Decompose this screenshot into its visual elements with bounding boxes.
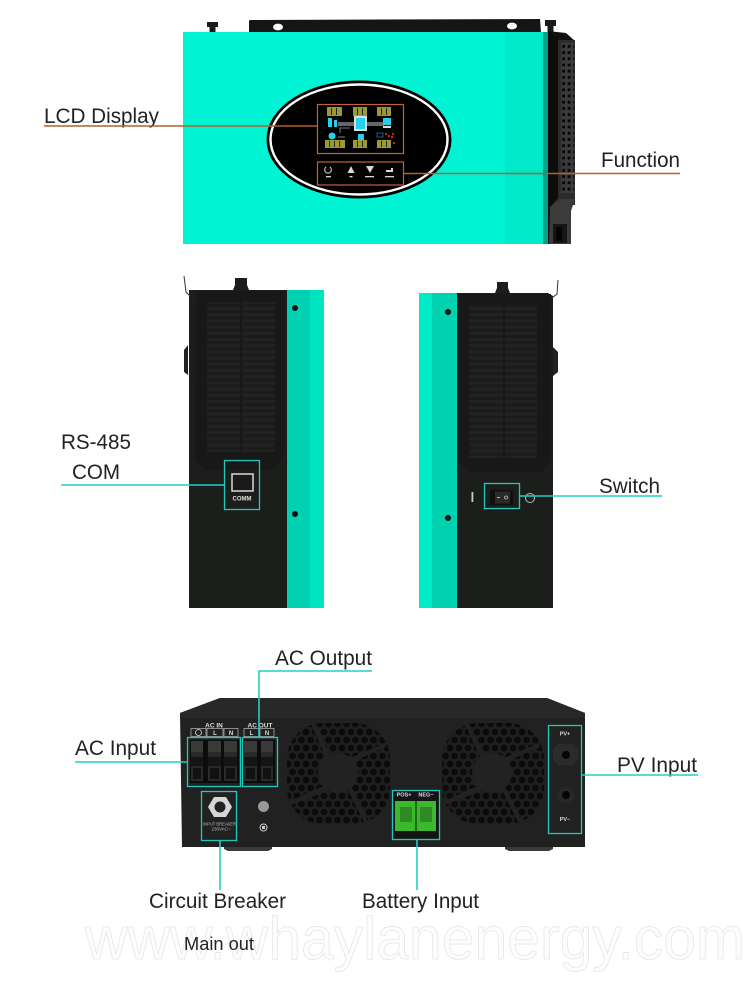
callout: AC Input: AC Input	[75, 737, 156, 760]
breaker nut: INPUT BREAKER	[203, 822, 237, 826]
AC IN labels: N	[265, 731, 269, 737]
AC IN labels	[191, 722, 274, 737]
fan left	[287, 723, 390, 824]
function buttons	[325, 166, 394, 177]
AC IN labels: N	[229, 731, 233, 737]
watermark: www.whaylanenergy.com	[84, 905, 745, 972]
AC IN labels: AC IN	[205, 722, 223, 730]
callout: LCD Display: LCD Display	[44, 105, 159, 128]
AC IN labels: L	[213, 731, 217, 737]
callout: PV Input	[548, 726, 698, 834]
top screws	[207, 22, 218, 32]
callout: Switch: Switch	[599, 475, 660, 498]
mounting bracket	[249, 19, 541, 32]
callout: AC Output	[242, 647, 372, 786]
vent grille	[195, 291, 285, 470]
AC terminals	[190, 740, 275, 783]
battery terminal: NEG−	[418, 792, 434, 798]
side panel	[548, 31, 575, 244]
front view of inverter	[183, 19, 575, 244]
indicator and ground	[258, 801, 269, 831]
left side view	[184, 276, 324, 608]
callout: Switch	[484, 475, 662, 508]
vent grille	[458, 294, 551, 472]
callout: Circuit Breaker	[149, 792, 286, 913]
teal side strip	[287, 290, 324, 608]
callout: Battery Input	[362, 790, 479, 913]
AC IN labels: AC OUT	[248, 722, 272, 730]
callout: Battery Input: Battery Input	[362, 890, 479, 913]
PV terminals: PV−	[560, 817, 570, 823]
PV terminals: PV+	[560, 732, 570, 738]
oval control panel	[266, 80, 452, 198]
callout: LCD Display	[44, 104, 404, 154]
COM port	[232, 474, 253, 502]
callout: Function: Function	[601, 149, 680, 172]
callout: AC Input	[75, 737, 240, 786]
text: Main out: Main out	[184, 934, 254, 954]
callout: RS-485 COM: RS-485	[61, 431, 131, 454]
battery terminal	[393, 790, 440, 839]
callout: AC Output: AC Output	[275, 647, 372, 670]
LCD icons	[325, 107, 395, 148]
breaker nut: 230VAC~	[211, 826, 231, 832]
breaker nut	[203, 797, 237, 832]
battery terminal: POS+	[397, 792, 411, 798]
chassis	[180, 698, 585, 847]
fan right	[442, 723, 544, 824]
teal side strip	[419, 293, 457, 608]
right side view	[419, 280, 558, 608]
PV terminals	[553, 732, 578, 823]
callout: Function	[318, 149, 680, 185]
callout: PV Input: PV Input	[617, 754, 697, 777]
callout: RS-485 COM	[61, 431, 260, 510]
power switch	[472, 490, 534, 505]
rear view of inverter	[180, 698, 585, 851]
AC IN labels: L	[250, 731, 254, 737]
COM port: COMM	[232, 496, 252, 502]
teal front panel	[183, 32, 548, 244]
callout: RS-485 COM: COM	[72, 461, 120, 484]
callout: Circuit Breaker: Circuit Breaker	[149, 890, 286, 913]
